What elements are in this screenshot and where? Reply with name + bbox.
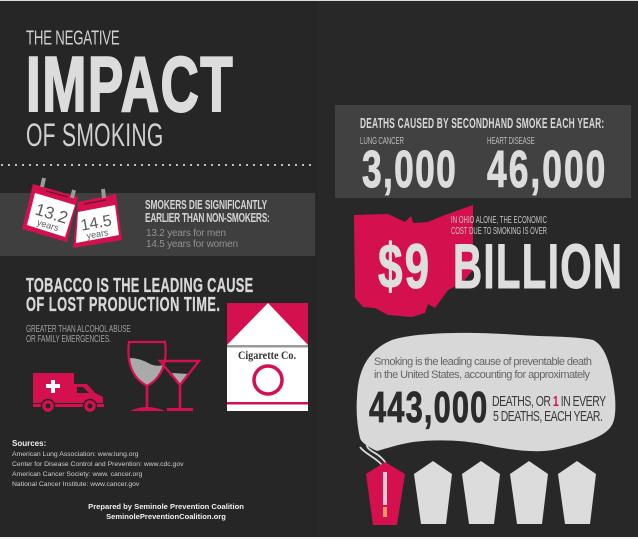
title [26,27,233,153]
heading: lost production time [26,274,253,316]
prepared by credit: SeminolePreventionCoalition.org [106,512,226,521]
text: earlier deaths: 14.5 years for women [146,239,238,250]
icon: calendar 14.5 years [73,189,122,248]
icon: coffin 2 [414,461,452,524]
icon: cigarette pack [227,303,308,411]
icon: coffin 4 [510,461,548,524]
panel: secondhand smoke deaths: 3,000 [362,141,456,199]
speech bubble: 443,000 [369,384,487,432]
text: greater than alcohol: OR FAMILY EMERGENCIES. [26,332,111,344]
title: THE NEGATIVE [26,27,120,49]
icon: ambulance [33,373,104,412]
icon: calendar 14.5 years: 14.5 [79,212,113,235]
panel: secondhand smoke deaths: LUNG CANCER [360,134,404,146]
text: greater than alcohol [26,322,131,344]
speech bubble: Smoking is the leading cause of preventable death [374,356,592,368]
icon: coffin 3 [462,461,500,524]
panel: secondhand smoke deaths [335,105,631,199]
icon: wine and martini glasses [128,342,199,411]
chart: one in five deaths pictogram [366,461,596,525]
speech bubble: DEATHS, OR 1 IN EVERY [492,392,606,409]
prepared by credit [88,502,244,521]
icon: calendar 13.2 years: 13.2 [33,200,70,228]
panel: Ohio economic cost [354,205,622,317]
icon: calendar 14.5 years: years [86,227,110,241]
heading: lost production time: OF LOST PRODUCTION TIME. [26,293,220,316]
panel: life expectancy [0,178,315,256]
title: IMPACT [26,42,233,129]
panel: secondhand smoke deaths: HEART DISEASE [487,134,535,146]
icon: cigarette pack: Cigarette Co. [238,348,296,362]
sources [12,439,184,488]
panel: Ohio economic cost: IN OHIO ALONE, THE ECONOMIC [451,215,547,225]
icon: highlighted coffin with cigarette [366,462,405,525]
panel: secondhand smoke deaths: 46,000 [487,141,605,199]
icon: Ohio map [354,205,473,317]
sources: Sources: [12,439,46,448]
title: OF SMOKING [26,116,163,153]
text: earlier deaths: EARLIER THAN NON-SMOKERS: [145,211,270,226]
prepared by credit: Prepared by Seminole Prevention Coalition [88,502,244,511]
sources: National Cancer Institute: www.cancer.gov [12,481,140,488]
sources: American Lung Association: www.lung.org [12,451,139,458]
speech bubble: in the United States, accounting for approximately [374,369,590,381]
sources: American Cancer Society: www. cancer.org [12,471,143,478]
icon: smoke wisp [360,442,387,473]
speech bubble: 5 DEATHS, EACH YEAR. [493,407,603,424]
text: earlier deaths: SMOKERS DIE SIGNIFICANTLY [145,198,268,213]
icon: coffin 5 [558,461,596,524]
text: earlier deaths: 13.2 years for men [146,228,226,239]
text: earlier deaths [145,198,270,250]
icon: calendar 13.2 years [22,178,78,242]
icon: calendar 13.2 years: years [36,217,60,233]
heading: lost production time: TOBACCO IS THE LEADING CAUSE [26,274,253,297]
panel: secondhand smoke deaths: DEATHS CAUSED BY SECONDHAND SMOKE EACH YEAR: [360,114,604,132]
panel: Ohio economic cost: $9 [378,231,429,302]
text: greater than alcohol: GREATER THAN ALCOHOL ABUSE [26,322,131,334]
panel: Ohio economic cost: COST DUE TO SMOKING IS OVER [451,226,547,236]
sources: Center for Disease Control and Prevention: www.cdc.gov [12,461,184,468]
speech bubble [357,333,615,451]
panel: Ohio economic cost: BILLION [453,232,622,302]
